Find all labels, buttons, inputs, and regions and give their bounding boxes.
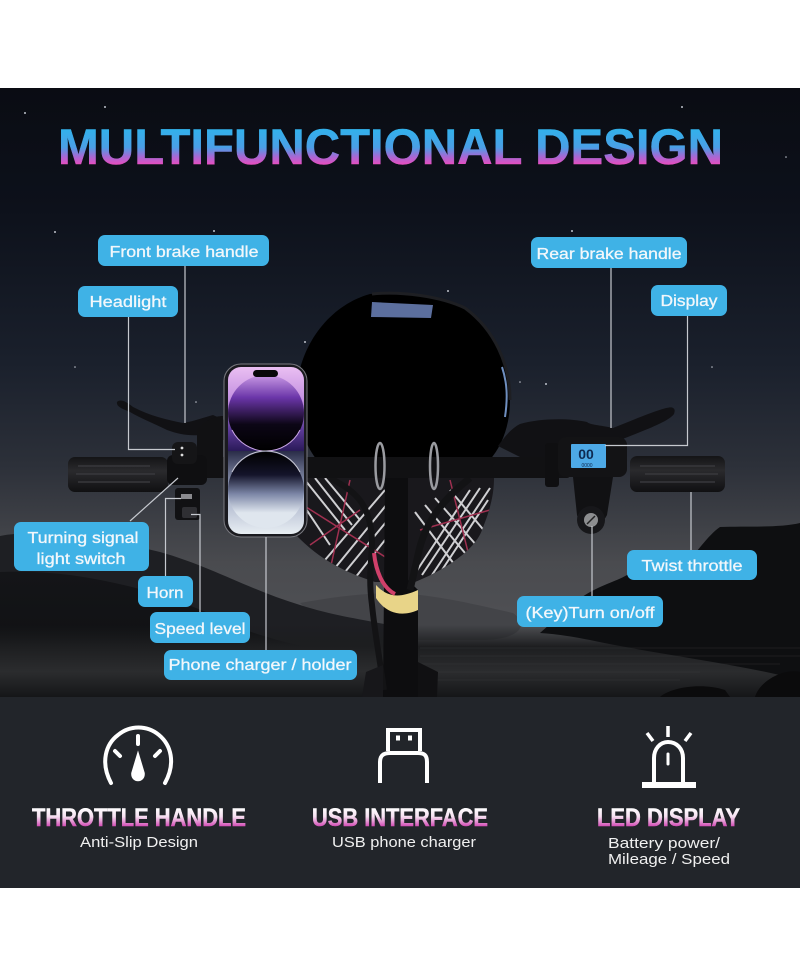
label: display	[651, 285, 727, 316]
label: turning signal: light switch	[36, 551, 126, 568]
icon: gauge	[105, 728, 171, 783]
label: horn	[138, 576, 193, 607]
feature: throttle handle: THROTTLE HANDLE	[32, 804, 246, 832]
callout labels	[14, 235, 757, 680]
feature: led display: LED DISPLAY	[597, 804, 740, 832]
label: horn: Horn	[146, 585, 184, 602]
label: phone charger: Phone charger / holder	[168, 657, 352, 674]
feature: usb interface	[312, 804, 488, 851]
label: front brake handle: Front brake handle	[110, 244, 259, 261]
feature: throttle handle	[32, 804, 246, 851]
label: speed level	[150, 612, 250, 643]
label: headlight: Headlight	[90, 294, 167, 311]
stem with cables and tape	[330, 478, 470, 697]
left brake lever	[117, 401, 224, 440]
label: rear brake handle: Rear brake handle	[536, 246, 682, 263]
feature: usb interface: USB phone charger	[332, 834, 476, 851]
phone on holder	[224, 364, 307, 537]
LCD display unit: 00	[578, 446, 594, 462]
key switch	[573, 477, 613, 534]
label: display: Display	[660, 293, 718, 310]
right brake lever	[498, 407, 675, 457]
title: MULTIFUNCTIONAL DESIGN	[58, 119, 723, 175]
label: rear brake handle	[531, 237, 687, 268]
label: turning signal: Turning signal	[28, 530, 138, 547]
LCD display unit: 0000	[581, 463, 593, 469]
label: front brake handle	[98, 235, 269, 266]
label: twist throttle: Twist throttle	[642, 558, 743, 575]
feature: led display: Battery power/	[608, 835, 721, 852]
leader lines	[128, 265, 691, 650]
label: phone charger	[164, 650, 357, 680]
right grip	[630, 456, 725, 492]
label: speed level: Speed level	[154, 621, 246, 638]
label: key	[517, 596, 663, 627]
product: scooter handlebar	[68, 293, 725, 697]
front basket shield	[296, 293, 510, 480]
feature: throttle handle: Anti-Slip Design	[80, 834, 198, 851]
hanging hooks	[376, 443, 438, 489]
plaid bag	[297, 478, 494, 582]
left grip	[68, 457, 168, 492]
LCD display unit	[545, 437, 627, 487]
label: twist throttle	[627, 550, 757, 580]
feature: led display	[597, 804, 740, 868]
label: turning signal	[14, 522, 149, 571]
bottom feature panel	[0, 697, 800, 888]
feature: led display: Mileage / Speed	[608, 851, 730, 868]
feature: usb interface: USB INTERFACE	[312, 804, 488, 832]
left switch cluster	[167, 416, 223, 520]
icon: siren light	[642, 726, 696, 785]
label: headlight	[78, 286, 178, 317]
icon: usb plug	[380, 730, 427, 783]
background scene: night desert	[0, 88, 800, 697]
handlebar tube	[200, 457, 570, 478]
label: key: (Key)Turn on/off	[526, 605, 655, 622]
